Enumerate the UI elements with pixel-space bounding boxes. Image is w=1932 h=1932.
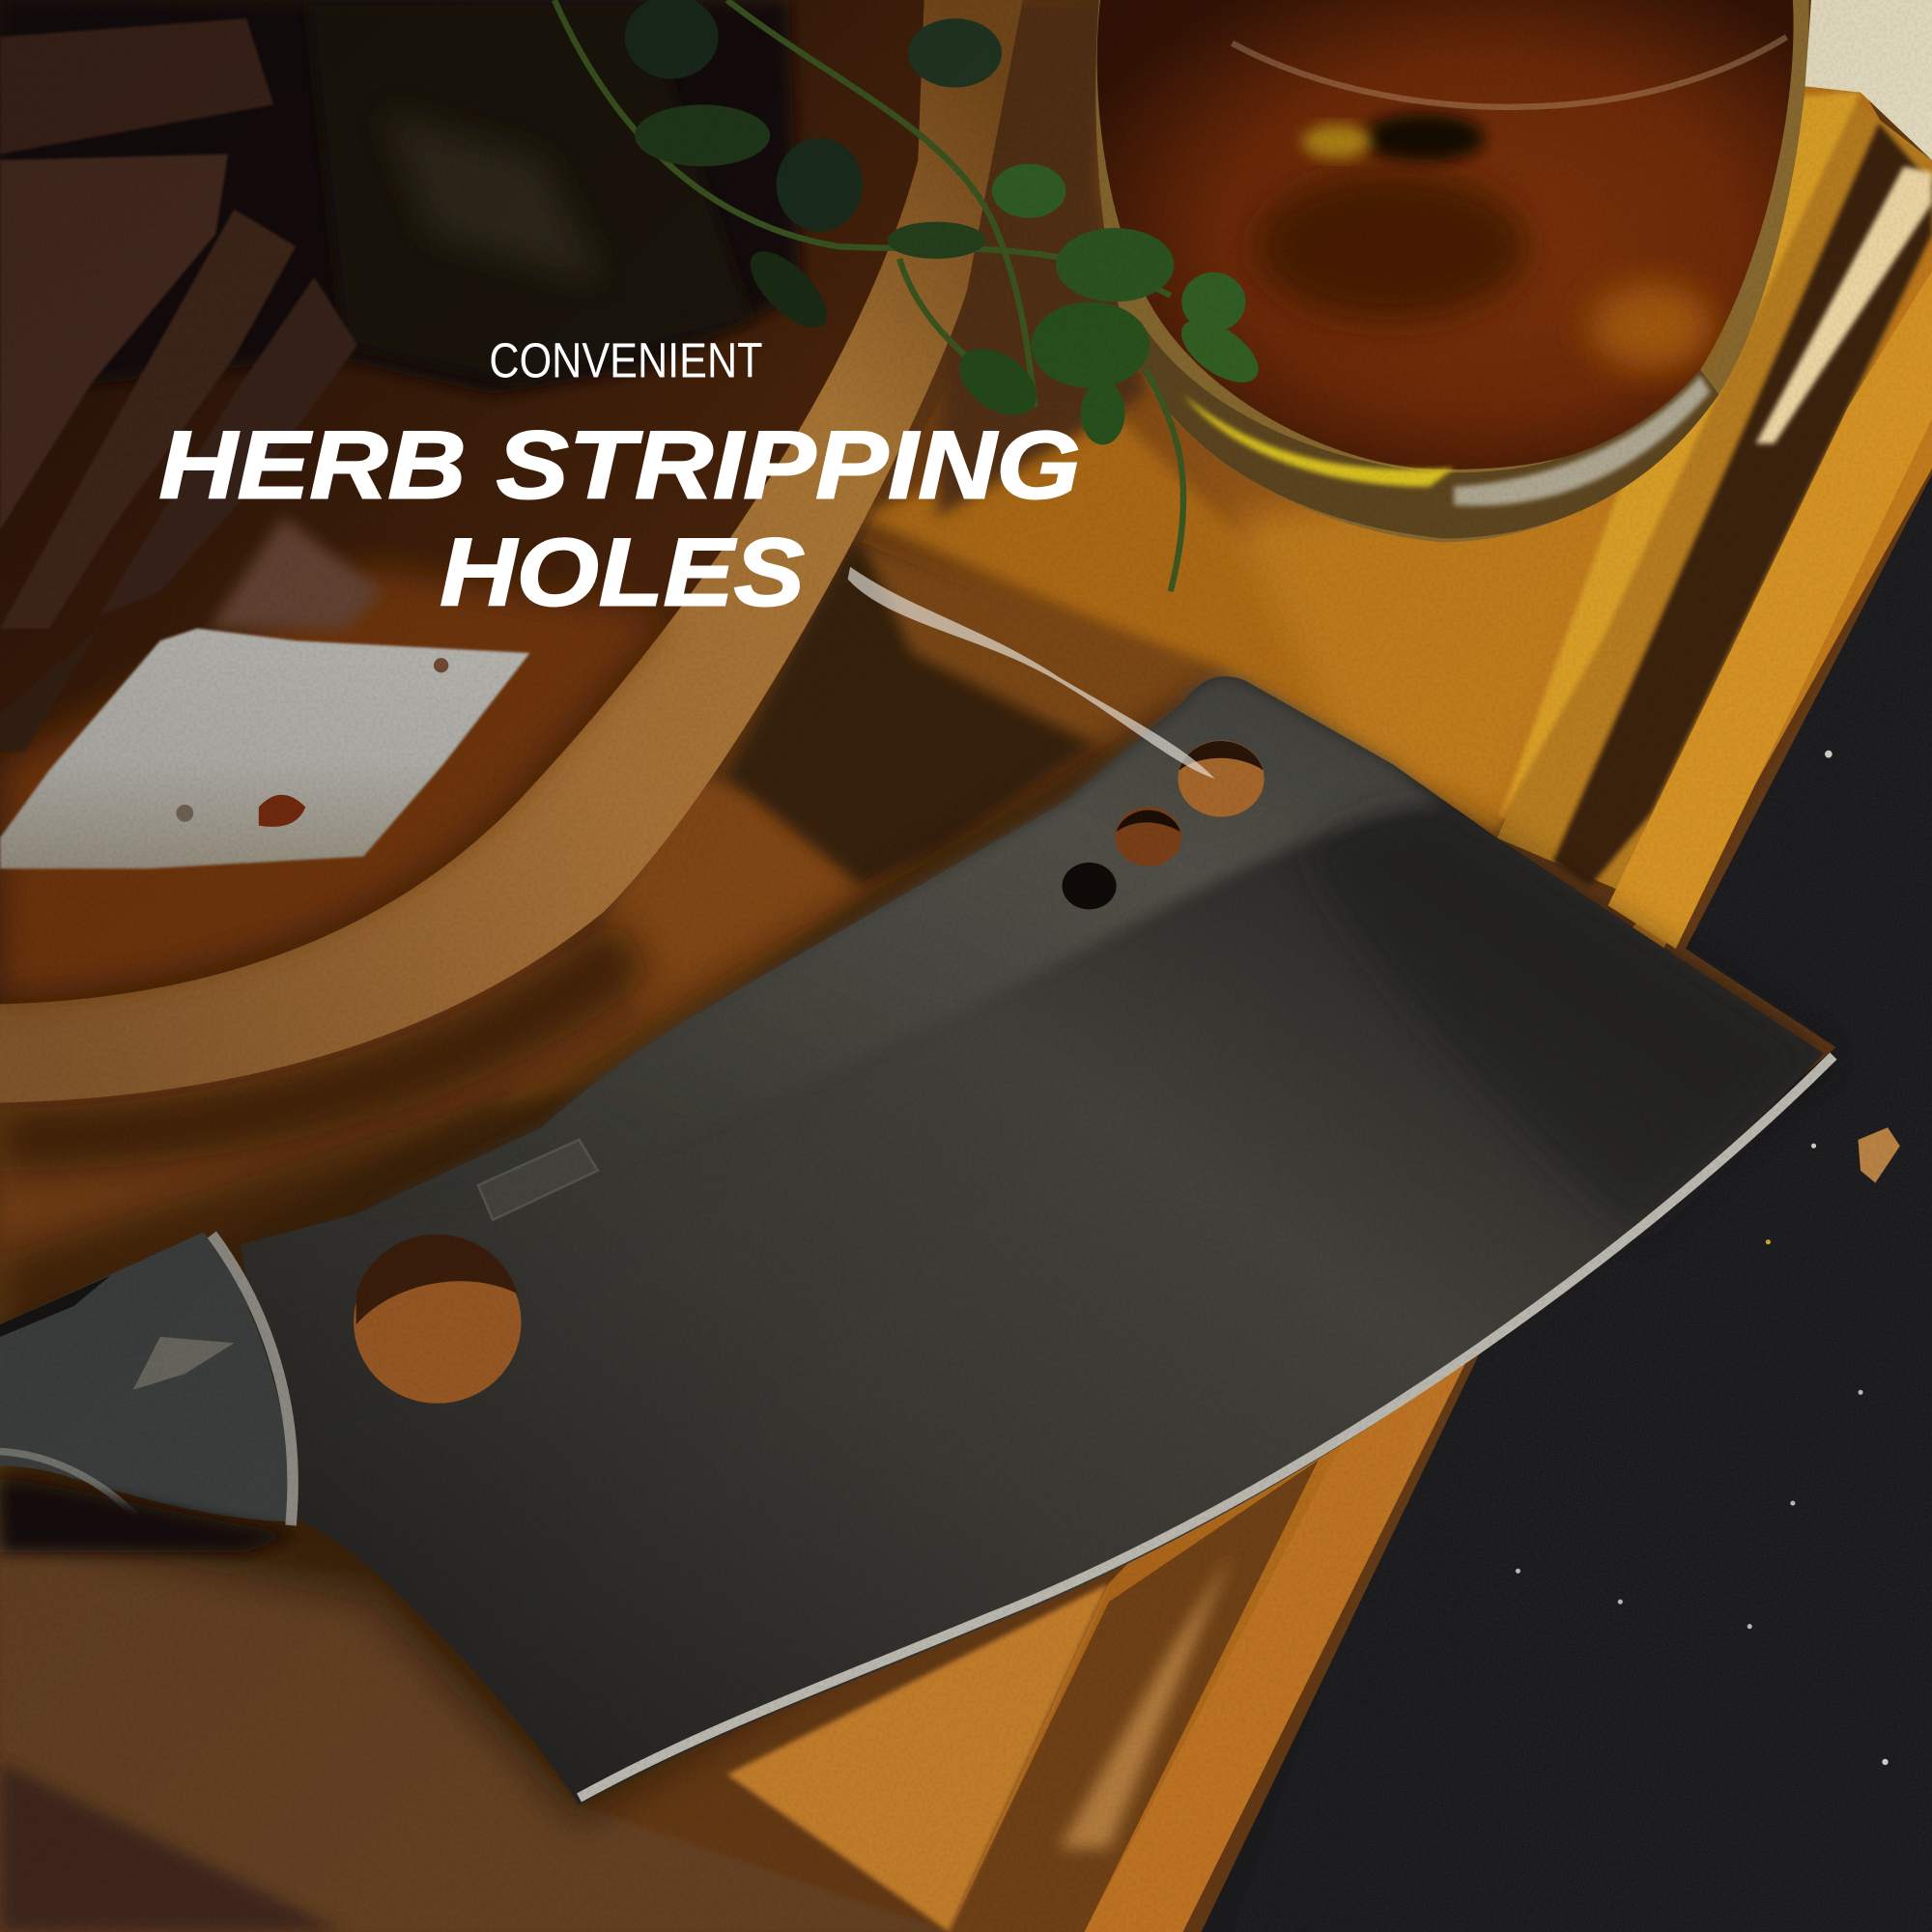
sharpened edge — [579, 1056, 1833, 1798]
board frame strips — [1497, 86, 1932, 894]
blade shading — [1306, 806, 1824, 1233]
herb stripping hole medium — [1115, 807, 1181, 867]
maker's stamp — [478, 1140, 598, 1220]
eyebrow: convenient: CONVENIENT — [489, 332, 763, 387]
title — [159, 332, 1081, 626]
herb stripping hole large — [1178, 741, 1264, 817]
wooden platter with meat — [0, 0, 1023, 1171]
heading: herb stripping: HERB STRIPPING — [159, 412, 1081, 519]
whisky glass — [1095, 0, 1932, 542]
meat slices — [0, 18, 357, 752]
black cloth — [1202, 474, 1932, 1932]
platter shadow — [0, 918, 653, 1171]
arrow: pointer line to hole — [848, 567, 1215, 779]
cutting board — [727, 0, 1932, 1932]
handle — [0, 1233, 296, 1521]
lighter spine area — [357, 676, 1441, 1213]
herb stripping hole small — [1062, 863, 1117, 909]
crumb — [1858, 1127, 1900, 1182]
large finger hole — [354, 1240, 522, 1404]
blade shadow — [0, 690, 1824, 1824]
sauce pool — [0, 629, 529, 868]
platter rim — [0, 0, 1023, 1103]
herb sprigs — [554, 0, 1269, 591]
dark meat mass — [0, 0, 801, 394]
cleaver — [0, 676, 1833, 1805]
blade body — [241, 676, 1824, 1805]
heading: holes: HOLES — [440, 519, 805, 626]
